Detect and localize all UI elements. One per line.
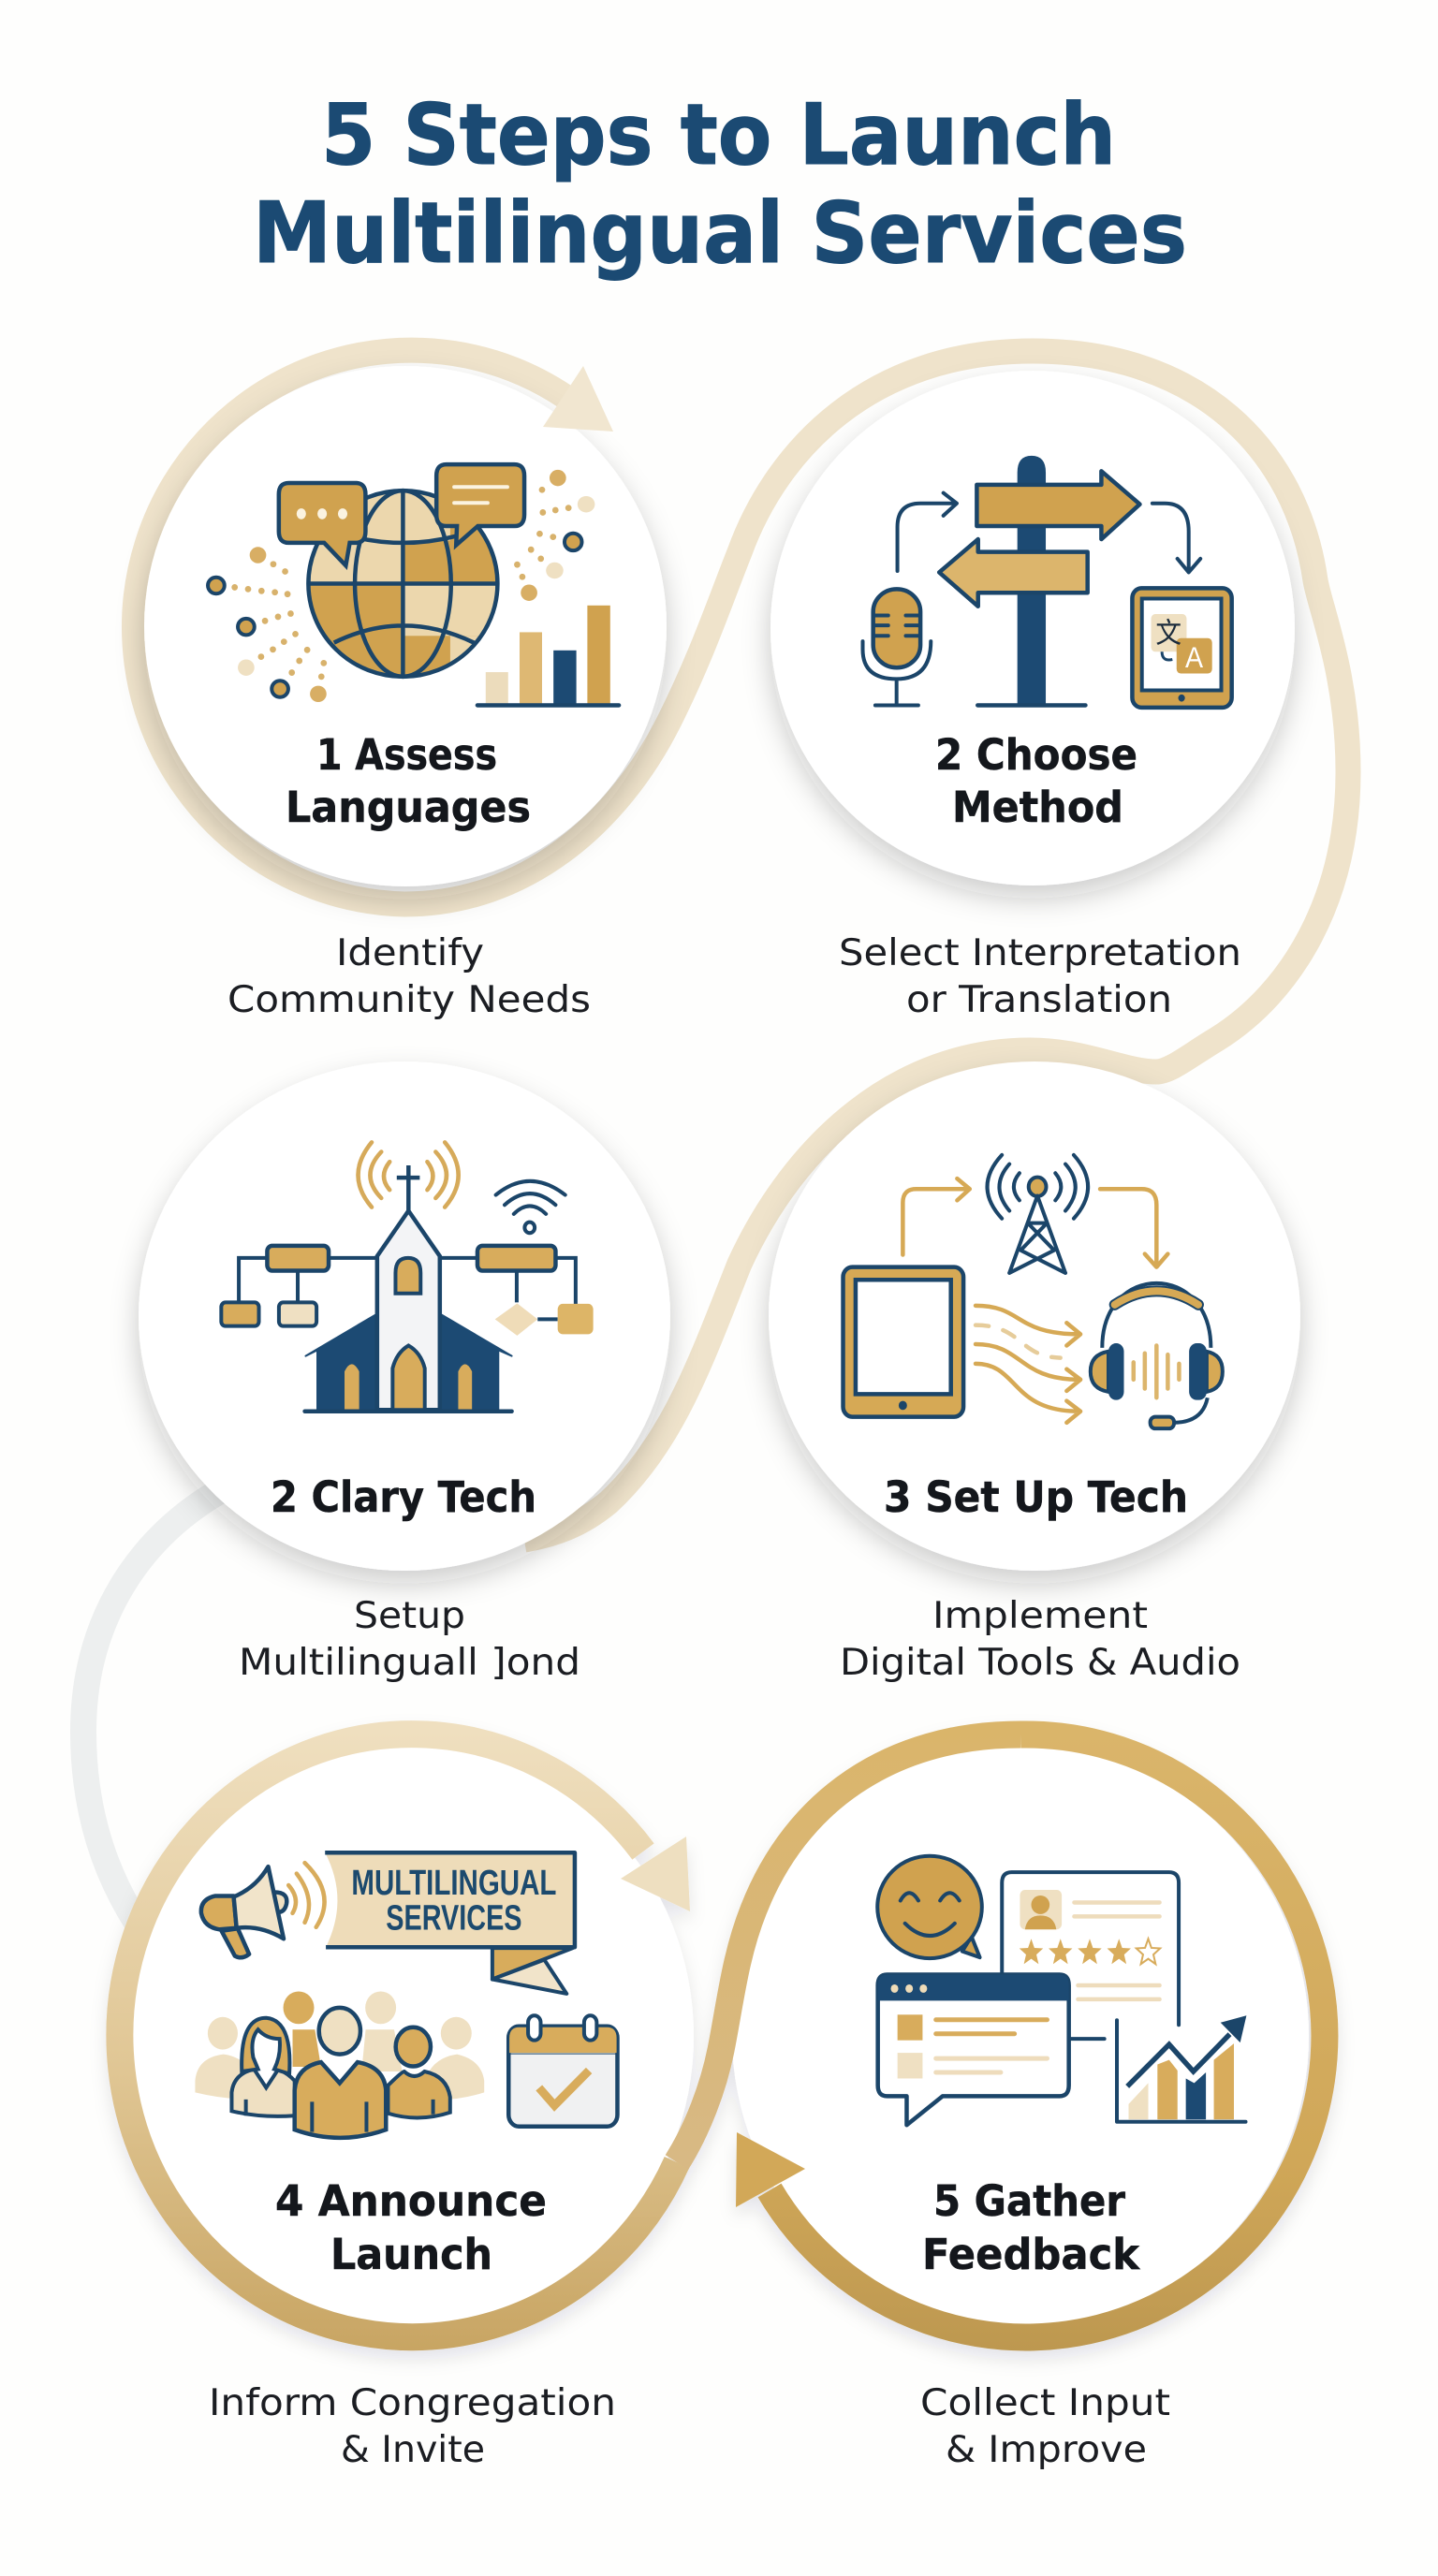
text: step 3b description: Implement: [932, 1595, 1148, 1637]
signal arcs: [359, 1142, 459, 1208]
text: step 1 description: Identify: [336, 932, 484, 974]
church: [305, 1165, 512, 1412]
arrow: step 4 arrowhead: [621, 1837, 690, 1911]
ring around step 4: [120, 1734, 677, 2337]
megaphone sound waves: [288, 1863, 325, 1927]
data dots right: [514, 470, 594, 601]
browser speech bubble: [878, 1975, 1069, 2125]
text: step 5 heading: [922, 2176, 1140, 2279]
text: step 3b heading: 3 Set Up Tech: [884, 1472, 1188, 1522]
speech bubble left: [279, 483, 365, 565]
ring around step 5: [770, 1734, 1325, 2337]
arrows: [898, 493, 1200, 572]
text: step 3 heading: 2 Clary Tech: [271, 1472, 536, 1522]
text: step 1 heading: 1 Assess: [316, 730, 497, 780]
icon: globe with speech bubbles, dots and bars: [208, 464, 619, 705]
bar chart: [477, 606, 619, 705]
flowchart: [221, 1246, 594, 1336]
people: [195, 1991, 484, 2138]
text: step 3b description: [840, 1595, 1240, 1684]
title: 5 Steps to Launch: [321, 86, 1116, 184]
data dots left: [208, 547, 327, 702]
icon: signpost with microphone and translation tablet: [863, 456, 1232, 708]
text: step 1 heading: [286, 730, 531, 832]
icon: church with signal and flowchart: [221, 1142, 594, 1412]
text: step 5 description: [920, 2382, 1170, 2471]
text: step 4 description: [209, 2382, 616, 2471]
text: step 2 description: Select Interpretation: [839, 932, 1241, 974]
text: step 4 description: & Invite: [341, 2429, 485, 2471]
text: step 5 heading: 5 Gather: [933, 2176, 1126, 2226]
connector: [1069, 2037, 1105, 2041]
text: step 4 heading: 4 Announce: [275, 2176, 547, 2226]
text: step 1 description: Community Needs: [227, 979, 591, 1021]
step 4 white disc: [130, 1745, 694, 2327]
icon: feedback smile, review card, window and chart: [877, 1856, 1246, 2125]
connector: pale ribbon looping through steps 1 to 3: [135, 350, 1348, 1540]
tablet: [844, 1267, 963, 1417]
signpost: [939, 456, 1139, 705]
panel: step 2 circle: [770, 371, 1295, 886]
text: step 1 description: [227, 932, 591, 1021]
icon: tablet, tower and headset: [844, 1155, 1223, 1428]
text: step 3 description: Setup: [354, 1595, 465, 1637]
text: step 5 heading: Feedback: [922, 2230, 1140, 2279]
panel: step 4 and 5 looping arrow rings: [120, 1734, 1325, 2337]
headset: [1091, 1283, 1223, 1428]
text: step 5 description: & Improve: [946, 2429, 1147, 2471]
title: [253, 86, 1187, 283]
banner: MULTILINGUAL: [351, 1863, 556, 1903]
tablet with translate: A: [1185, 642, 1203, 675]
text: step 5 description: Collect Input: [920, 2382, 1170, 2424]
text: step 2 description: or Translation: [906, 979, 1172, 1021]
tablet with translate: [1132, 588, 1232, 708]
text: step 3 description: [239, 1595, 580, 1684]
text: step 4 heading: [275, 2176, 547, 2279]
calendar: [508, 2015, 617, 2127]
panel: step 3b circle: [769, 1061, 1300, 1571]
icon: megaphone, banner, people and calendar: [195, 1852, 617, 2138]
text: step 4 description: Inform Congregation: [209, 2382, 616, 2424]
text: step 2 heading: 2 Choose: [935, 730, 1137, 780]
smile bubble: [877, 1856, 982, 1958]
review card: [1002, 1872, 1179, 2025]
text: step 2 heading: Method: [952, 783, 1123, 832]
text: step 2 heading: [935, 730, 1137, 832]
arrow: step 1 arrowhead: [543, 366, 613, 432]
text: step 1 heading: Languages: [286, 783, 531, 832]
tablet with translate: 文: [1155, 619, 1181, 650]
connector: gray path from step 3 to step 4: [83, 1488, 225, 1928]
arrow: step 5 arrowhead: [736, 2132, 805, 2207]
globe: [308, 490, 497, 677]
banner: [325, 1852, 575, 1994]
growth chart: [1117, 2015, 1246, 2122]
arrows: [902, 1178, 1167, 1423]
S-curve between step 4 and 5: [677, 1734, 1020, 2162]
speech bubble right: [436, 464, 524, 545]
text: step 3b description: Digital Tools & Audio: [840, 1642, 1240, 1684]
text: step 3 description: Multilinguall ]ond: [239, 1642, 580, 1684]
text: step 4 heading: Launch: [330, 2230, 492, 2279]
tower: [988, 1155, 1088, 1273]
step 5 white disc: [732, 1745, 1309, 2327]
text: step 2 description: [839, 932, 1241, 1021]
panel: step 1 circle: [144, 366, 667, 886]
wifi: [496, 1181, 565, 1233]
megaphone: [201, 1866, 286, 1957]
title: Multilingual Services: [253, 184, 1187, 283]
panel: step 3 circle: [139, 1061, 670, 1571]
banner: SERVICES: [386, 1897, 522, 1938]
microphone: [863, 589, 931, 705]
